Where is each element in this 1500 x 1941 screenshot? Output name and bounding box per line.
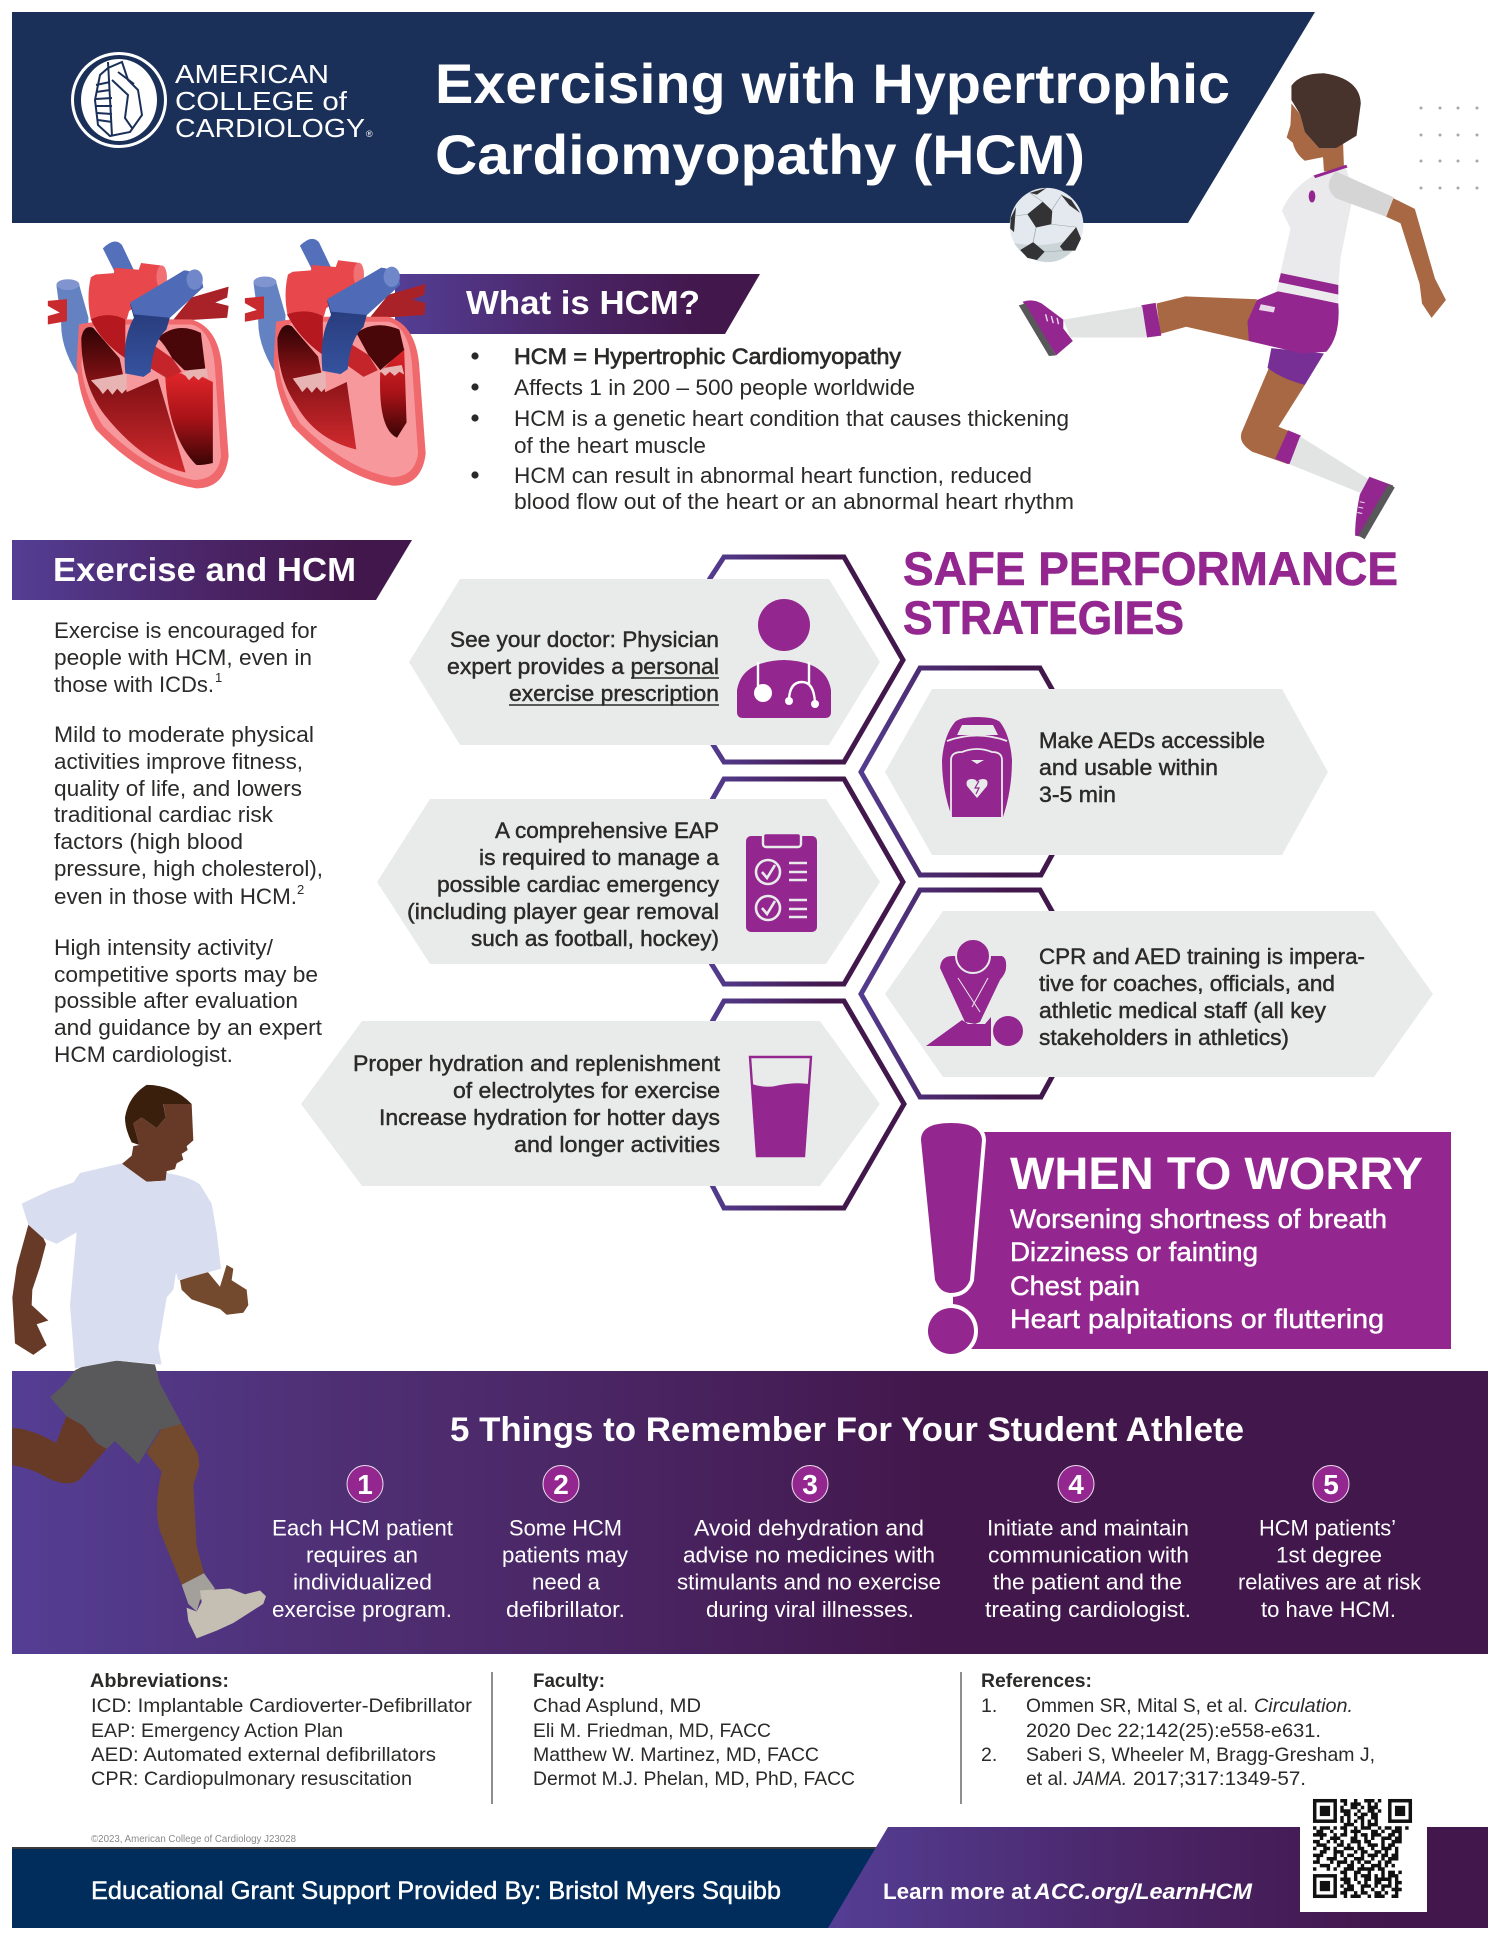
item 4: treating cardiologist. xyxy=(985,1597,1191,1622)
safe performance strategies heading: SAFE PERFORMANCE xyxy=(903,542,1398,595)
text: hydration: Proper hydration and replenishment xyxy=(353,1051,720,1076)
title xyxy=(435,52,1230,186)
references column: 2020 Dec 22;142(25):e558-e631. xyxy=(1026,1720,1321,1742)
illustration: soccer player xyxy=(1010,73,1446,539)
item 4 xyxy=(985,1466,1191,1622)
item 1: requires an xyxy=(306,1542,418,1568)
item 3: advise no medicines with xyxy=(683,1542,935,1568)
icon: glass of water xyxy=(750,1057,811,1156)
item 3: stimulants and no exercise xyxy=(677,1570,941,1594)
footer: learn more bar xyxy=(828,1827,1488,1928)
text: hydration xyxy=(353,1051,720,1157)
decorative dots grid xyxy=(1420,106,1478,190)
item 5: 1st degree xyxy=(1276,1542,1382,1568)
abbreviations column: Abbreviations: xyxy=(90,1670,229,1692)
text: emergency action plan: is required to manage a xyxy=(479,845,720,870)
text: CPR training: athletic medical staff (all key xyxy=(1039,998,1326,1023)
logo wordmark: COLLEGE of xyxy=(175,86,348,116)
abbreviations column: CPR: Cardiopulmonary resuscitation xyxy=(91,1768,412,1790)
item 4: communication with xyxy=(988,1542,1189,1568)
header banner xyxy=(12,12,1315,223)
item 4: Initiate and maintain xyxy=(987,1516,1189,1540)
text: see your doctor: expert provides a personal xyxy=(447,654,719,679)
text: hydration: Increase hydration for hotter days xyxy=(379,1105,720,1130)
what is HCM bullet list: blood flow out of the heart or an abnormal heart rhythm xyxy=(514,489,1074,514)
text: AEDs: Make AEDs accessible xyxy=(1039,728,1265,753)
item 2: need a xyxy=(532,1570,600,1594)
text: emergency action plan: (including player gear removal xyxy=(407,899,719,924)
text: see your doctor: See your doctor: Physician xyxy=(450,627,719,652)
when to worry text: Worsening shortness of breath xyxy=(1010,1204,1387,1234)
hexagon: hydration xyxy=(301,1001,904,1208)
safe performance strategies heading xyxy=(903,542,1398,644)
QR code xyxy=(1300,1790,1427,1912)
references column: JAMA. xyxy=(1072,1768,1127,1790)
text: emergency action plan: possible cardiac emergency xyxy=(437,872,719,897)
exercise and HCM body text: High intensity activity/ xyxy=(54,935,274,960)
illustration: thickened HCM heart xyxy=(245,239,426,486)
exercise and HCM body text: those with ICDs. xyxy=(54,672,214,697)
faculty column: Matthew W. Martinez, MD, FACC xyxy=(533,1744,819,1766)
title: Cardiomyopathy (HCM) xyxy=(435,123,1085,186)
logo wordmark xyxy=(175,59,373,143)
ACC logo xyxy=(71,52,373,148)
copyright note: ©2023, American College of Cardiology J23028 xyxy=(91,1834,296,1845)
five things panel xyxy=(12,1371,1488,1654)
exercise and HCM body text: pressure, high cholesterol), xyxy=(54,856,323,881)
exercise and HCM body text: 1 xyxy=(215,670,222,685)
text: hydration: and longer activities xyxy=(514,1132,720,1157)
references column: 2017;317:1349-57. xyxy=(1133,1768,1306,1790)
item 3 xyxy=(677,1466,941,1622)
exercise and HCM body text: HCM cardiologist. xyxy=(54,1042,233,1067)
exercise and HCM body text xyxy=(54,618,323,1067)
exercise and HCM body text: traditional cardiac risk xyxy=(54,802,274,827)
references column: et al. xyxy=(1026,1768,1068,1790)
hexagon: see your doctor xyxy=(409,557,903,762)
text: emergency action plan: such as football, hockey) xyxy=(471,926,719,951)
item 2: defibrillator. xyxy=(506,1597,625,1622)
exercise and HCM banner: Exercise and HCM xyxy=(53,551,356,588)
item 1: individualized xyxy=(293,1570,432,1594)
what is HCM bullet list: HCM = Hypertrophic Cardiomyopathy xyxy=(514,344,902,369)
footer: grant support bar xyxy=(12,1847,892,1928)
item 4: 4 xyxy=(1068,1469,1084,1500)
icon: AED device xyxy=(942,717,1012,817)
text: see your doctor xyxy=(447,627,719,706)
title: Exercising with Hypertrophic xyxy=(435,52,1230,115)
what is HCM bullet list: HCM can result in abnormal heart function, reduced xyxy=(514,463,1032,488)
faculty column: Faculty: xyxy=(533,1670,605,1692)
what is HCM bullet list: of the heart muscle xyxy=(514,433,706,458)
item 3: during viral illnesses. xyxy=(706,1597,914,1622)
when to worry text: Chest pain xyxy=(1010,1271,1140,1301)
icon: doctor xyxy=(737,599,831,718)
when to worry panel xyxy=(921,1123,1451,1354)
references column: Circulation. xyxy=(1254,1695,1353,1717)
text: AEDs xyxy=(1039,728,1265,807)
icon: clipboard xyxy=(746,833,817,932)
when to worry text xyxy=(1010,1148,1423,1334)
exercise and HCM body text: people with HCM, even in xyxy=(54,645,312,670)
illustration: normal heart xyxy=(48,242,229,488)
what is HCM banner: What is HCM? xyxy=(466,284,700,321)
footer: learn more bar: Learn more at xyxy=(883,1879,1031,1904)
references column: Ommen SR, Mital S, et al. xyxy=(1026,1695,1248,1717)
exercise and HCM body text: and guidance by an expert xyxy=(54,1015,323,1040)
what is HCM bullet list: HCM is a genetic heart condition that causes thickening xyxy=(514,406,1069,431)
abbreviations column: EAP: Emergency Action Plan xyxy=(91,1720,343,1742)
exercise and HCM banner xyxy=(12,540,412,600)
abbreviations column: ICD: Implantable Cardioverter-Defibrillator xyxy=(91,1695,473,1717)
text: emergency action plan xyxy=(407,818,720,951)
item 2 xyxy=(502,1466,629,1622)
logo wordmark: AMERICAN xyxy=(175,59,329,89)
exercise and HCM body text: possible after evaluation xyxy=(54,988,298,1013)
item 5: HCM patients’ xyxy=(1259,1516,1396,1540)
exercise and HCM body text: quality of life, and lowers xyxy=(54,776,302,801)
footer: learn more bar: ACC.org/LearnHCM xyxy=(1033,1879,1253,1904)
abbreviations column xyxy=(90,1670,473,1790)
text: CPR training: tive for coaches, officials, and xyxy=(1039,971,1335,996)
text: CPR training: stakeholders in athletics) xyxy=(1039,1025,1289,1050)
text: CPR training: CPR and AED training is impera- xyxy=(1039,944,1365,969)
text: see your doctor: exercise prescription xyxy=(509,681,719,706)
item 5: relatives are at risk xyxy=(1238,1570,1422,1594)
hexagon: AEDs xyxy=(861,668,1328,875)
hexagon: CPR training xyxy=(861,890,1433,1097)
item 1: 1 xyxy=(357,1469,373,1500)
what is HCM bullet list: Affects 1 in 200 – 500 people worldwide xyxy=(514,375,915,400)
safe performance strategies heading: STRATEGIES xyxy=(903,591,1184,644)
when to worry text: WHEN TO WORRY xyxy=(1010,1148,1423,1199)
exercise and HCM body text: Mild to moderate physical xyxy=(54,722,314,747)
footer: grant support bar: Educational Grant Support Provided By: Bristol Myers Squibb xyxy=(91,1877,781,1905)
logo wordmark: CARDIOLOGY xyxy=(175,113,365,143)
hexagon: emergency action plan xyxy=(377,779,903,984)
references column xyxy=(981,1670,1375,1790)
soccer ball xyxy=(1010,188,1083,262)
what is HCM bullet list xyxy=(471,344,1074,514)
item 1 xyxy=(272,1466,454,1622)
item 2: 2 xyxy=(553,1469,569,1500)
exercise and HCM body text: even in those with HCM. xyxy=(54,884,297,909)
icon: exclamation mark xyxy=(921,1123,982,1354)
exercise and HCM body text: Exercise is encouraged for xyxy=(54,618,317,643)
item 2: patients may xyxy=(502,1542,629,1568)
references column: 2. xyxy=(981,1744,997,1766)
item 1: Each HCM patient xyxy=(272,1516,454,1540)
item 3: 3 xyxy=(802,1469,818,1500)
references column: Saberi S, Wheeler M, Bragg-Gresham J, xyxy=(1026,1744,1375,1766)
exercise and HCM body text: activities improve fitness, xyxy=(54,749,303,774)
when to worry text: Dizziness or fainting xyxy=(1010,1237,1258,1267)
exercise and HCM body text: competitive sports may be xyxy=(54,962,318,987)
item 4: the patient and the xyxy=(993,1570,1182,1594)
item 5 xyxy=(1238,1466,1422,1622)
five things title: 5 Things to Remember For Your Student Athlete xyxy=(450,1411,1244,1449)
icon: CPR xyxy=(926,939,1023,1046)
text: AEDs: 3-5 min xyxy=(1039,782,1116,807)
faculty column xyxy=(533,1670,855,1790)
item 5: to have HCM. xyxy=(1261,1597,1396,1622)
item 2: Some HCM xyxy=(509,1516,622,1540)
faculty column: Eli M. Friedman, MD, FACC xyxy=(533,1720,771,1742)
when to worry text: Heart palpitations or fluttering xyxy=(1010,1304,1384,1334)
illustration: runner xyxy=(12,1085,266,1638)
abbreviations column: AED: Automated external defibrillators xyxy=(91,1744,436,1766)
references column: References: xyxy=(981,1670,1092,1692)
text: CPR training xyxy=(1039,944,1365,1050)
faculty column: Dermot M.J. Phelan, MD, PhD, FACC xyxy=(533,1768,855,1790)
what is HCM banner xyxy=(395,274,760,334)
references column: 1. xyxy=(981,1695,997,1717)
item 5: 5 xyxy=(1323,1469,1339,1500)
text: hydration: of electrolytes for exercise xyxy=(453,1078,720,1103)
exercise and HCM body text: factors (high blood xyxy=(54,829,243,854)
item 3: Avoid dehydration and xyxy=(694,1516,924,1540)
item 1: exercise program. xyxy=(272,1597,452,1622)
text: emergency action plan: A comprehensive EAP xyxy=(495,818,719,843)
logo wordmark: ® xyxy=(366,129,373,139)
exercise and HCM body text: 2 xyxy=(297,882,304,897)
text: AEDs: and usable within xyxy=(1039,755,1218,780)
faculty column: Chad Asplund, MD xyxy=(533,1695,701,1717)
